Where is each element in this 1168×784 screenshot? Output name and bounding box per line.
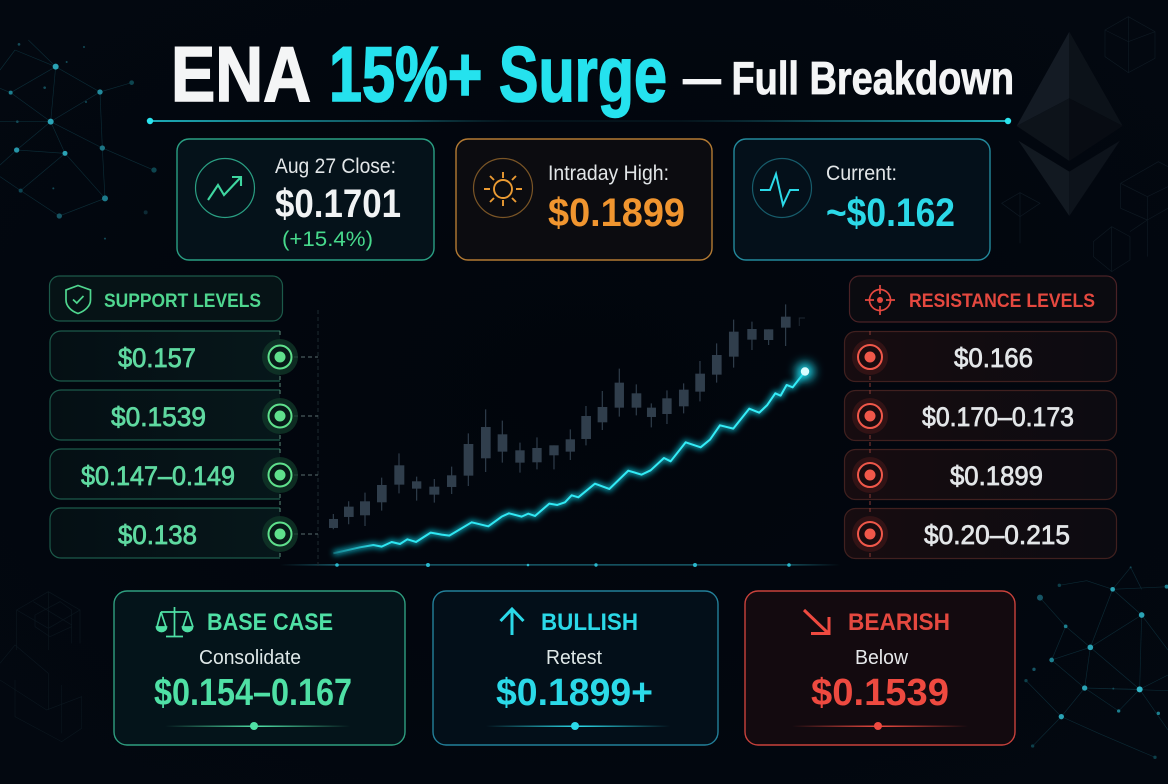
resistance level 4: $0.20–0.215 bbox=[924, 520, 1070, 550]
title bbox=[171, 30, 1014, 118]
axis with markers bbox=[280, 563, 840, 567]
price line bbox=[333, 372, 805, 553]
label: Aug 27 Close: Aug 27 Close: bbox=[275, 155, 396, 178]
isometric cubes: bottom left bbox=[0, 592, 82, 742]
support level 1 bbox=[50, 331, 298, 381]
title divider bbox=[147, 118, 1011, 124]
icon: trending up bbox=[196, 158, 254, 218]
value: $0.1701: $0.1701 bbox=[275, 182, 401, 226]
support level 3: $0.147–0.149 bbox=[81, 461, 235, 491]
support level 1: $0.157 bbox=[118, 343, 196, 373]
support vertical connector bbox=[279, 331, 281, 558]
icon: pulse bbox=[752, 158, 812, 218]
resistance guide line bbox=[869, 331, 871, 558]
panel: bearish bbox=[745, 591, 1015, 745]
accent line bbox=[486, 722, 670, 730]
resistance level 1: $0.166 bbox=[954, 343, 1033, 373]
network: top left bbox=[0, 40, 157, 240]
value: $0.1899: $0.1899 bbox=[548, 191, 685, 235]
heading: base case: BASE CASE bbox=[207, 609, 333, 636]
current price marker bbox=[796, 362, 814, 380]
support level 4: $0.138 bbox=[118, 520, 197, 550]
panel: resistance levels bbox=[844, 331, 1116, 558]
icon: down-right arrow bbox=[804, 610, 829, 634]
panel: Aug 27 close bbox=[177, 139, 434, 260]
panel: base case bbox=[114, 591, 405, 745]
label: below: Below bbox=[855, 647, 909, 669]
support guide lines bbox=[294, 310, 318, 566]
resistance level 2: $0.170–0.173 bbox=[922, 402, 1074, 432]
change: +15.4%: (+15.4%) bbox=[282, 228, 373, 251]
resistance level 4 bbox=[844, 508, 1116, 558]
label: Intraday High: Intraday High: bbox=[548, 162, 669, 185]
icon: crosshair target bbox=[865, 285, 895, 315]
panel: resistance levels header bbox=[850, 276, 1116, 322]
title: Full Breakdown: — Full Breakdown bbox=[683, 52, 1014, 104]
heading: bearish: BEARISH bbox=[848, 609, 950, 636]
panel: bullish bbox=[433, 591, 718, 745]
support level 2: $0.1539 bbox=[111, 402, 206, 432]
chart bbox=[280, 304, 840, 567]
heading: resistance levels: RESISTANCE LEVELS bbox=[909, 291, 1095, 312]
support level 4 bbox=[50, 508, 298, 558]
value: bearish level: $0.1539 bbox=[811, 672, 949, 714]
label: consolidate: Consolidate bbox=[199, 647, 301, 669]
panel: support levels bbox=[50, 331, 298, 558]
support level 3 bbox=[50, 449, 298, 499]
label: Current: Current: bbox=[826, 162, 897, 185]
resistance level 2 bbox=[844, 390, 1116, 440]
isometric cubes: top right bbox=[1002, 17, 1168, 272]
price line glow bbox=[333, 372, 805, 553]
accent line bbox=[792, 722, 968, 730]
value: bullish target: $0.1899+ bbox=[496, 672, 653, 714]
icon: ethereum logo bbox=[1017, 32, 1123, 216]
value: base range: $0.154–0.167 bbox=[154, 672, 352, 714]
candlesticks bbox=[329, 304, 805, 529]
icon: sun bbox=[474, 158, 532, 218]
resistance level 1 bbox=[844, 332, 1116, 382]
panel: current price bbox=[734, 139, 990, 260]
title: ENA: ENA bbox=[171, 30, 311, 118]
resistance level 3 bbox=[844, 450, 1116, 500]
accent line bbox=[165, 722, 350, 730]
panel: support levels header bbox=[50, 276, 282, 321]
network: bottom right bbox=[1024, 566, 1168, 759]
title: 15%+ Surge: 15%+ Surge bbox=[329, 30, 667, 118]
value: ~$0.162: ~$0.162 bbox=[826, 191, 955, 235]
resistance level 3: $0.1899 bbox=[950, 461, 1043, 491]
heading: support levels: SUPPORT LEVELS bbox=[104, 291, 261, 312]
support level 2 bbox=[50, 390, 298, 440]
icon: balance scale bbox=[156, 607, 193, 636]
heading: bullish: BULLISH bbox=[541, 609, 638, 636]
panel: intraday high bbox=[456, 139, 712, 260]
icon: up arrow bbox=[500, 609, 524, 635]
label: retest: Retest bbox=[546, 647, 602, 669]
icon: shield check bbox=[66, 286, 90, 314]
